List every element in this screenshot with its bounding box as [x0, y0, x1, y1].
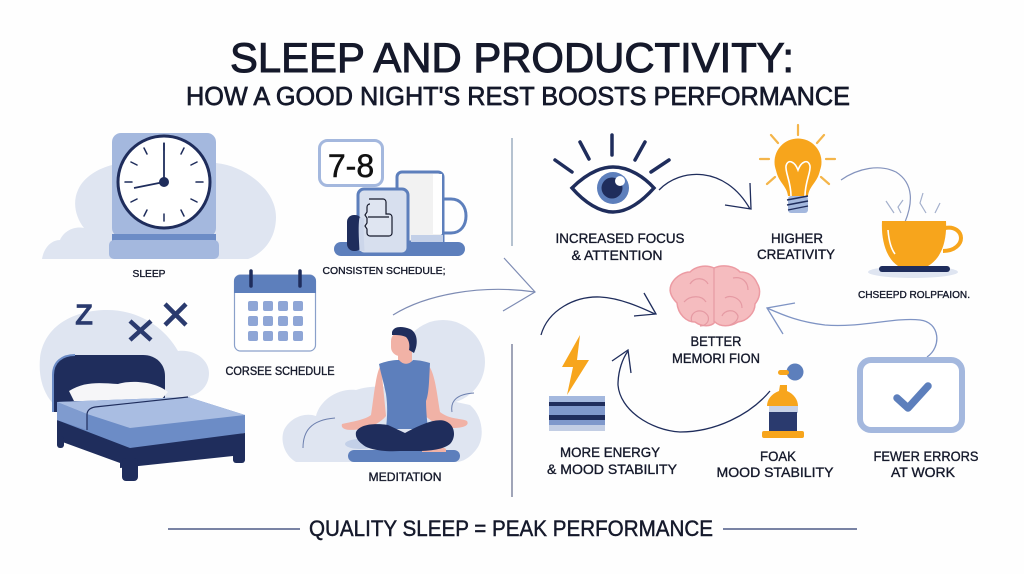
label: cup caption: CHSEEPD ROLPFAION.: [858, 289, 970, 301]
icon: checkbox: [860, 360, 962, 430]
icon: calendar: [234, 271, 316, 351]
vertical divider top: [511, 138, 513, 246]
label: meditation: MEDITATION: [368, 472, 442, 484]
icon: coffee cup: [868, 193, 961, 278]
title: SLEEP AND PRODUCTIVITY:: [230, 34, 794, 81]
arrow: errors to brain right: [767, 303, 937, 357]
label: corsee schedule: CORSEE SCHEDULE: [226, 366, 335, 378]
label: foak: FOAK: [760, 448, 797, 464]
label: mood stability: MOOD STABILITY: [716, 464, 834, 480]
icon: lightning and battery: [549, 335, 605, 431]
icon: 7-8 hours schedule with mug: [320, 140, 466, 256]
icon: eye: [555, 135, 669, 212]
arrow: bottle to battery: [612, 350, 770, 432]
label: increased focus: INCREASED FOCUS: [556, 230, 684, 246]
label: at work: AT WORK: [891, 464, 956, 480]
label: better: BETTER: [690, 333, 742, 349]
icon: brain: [670, 266, 760, 326]
label: and attention: & ATTENTION: [572, 247, 662, 263]
icon: bed with Z X X: Z: [75, 299, 93, 330]
label: higher: HIGHER: [771, 230, 823, 246]
arrow: left side to centre: [393, 258, 535, 315]
arrow: eye to bulb: [659, 174, 751, 209]
icon: bed with Z X X: [40, 299, 245, 481]
arrow: bulb to cup: [841, 168, 910, 222]
icon: alarm clock on cloud: [42, 133, 276, 259]
label: more energy: MORE ENERGY: [560, 444, 661, 460]
label: consistent schedule: CONSISTEN SCHEDULE;: [322, 265, 446, 277]
footer tagline: QUALITY SLEEP = PEAK PERFORMANCE: [309, 516, 713, 541]
icon: meditating person on cloud: [282, 320, 485, 462]
text: 7-8: 7-8: [328, 148, 374, 184]
label: creativity: CREATIVITY: [757, 246, 836, 262]
arrow: curve to brain left: [541, 293, 656, 335]
label: fewer errors: FEWER ERRORS: [874, 448, 978, 464]
icon: spray bottle: [762, 364, 804, 438]
label: memori fion: MEMORI FION: [672, 350, 760, 366]
subtitle: HOW A GOOD NIGHT'S REST BOOSTS PERFORMANCE: [186, 81, 850, 111]
vertical divider bottom: [511, 344, 513, 497]
label: sleep: SLEEP: [132, 268, 166, 280]
icon: light bulb: [760, 125, 835, 213]
label: and mood stability: & MOOD STABILITY: [547, 461, 678, 477]
